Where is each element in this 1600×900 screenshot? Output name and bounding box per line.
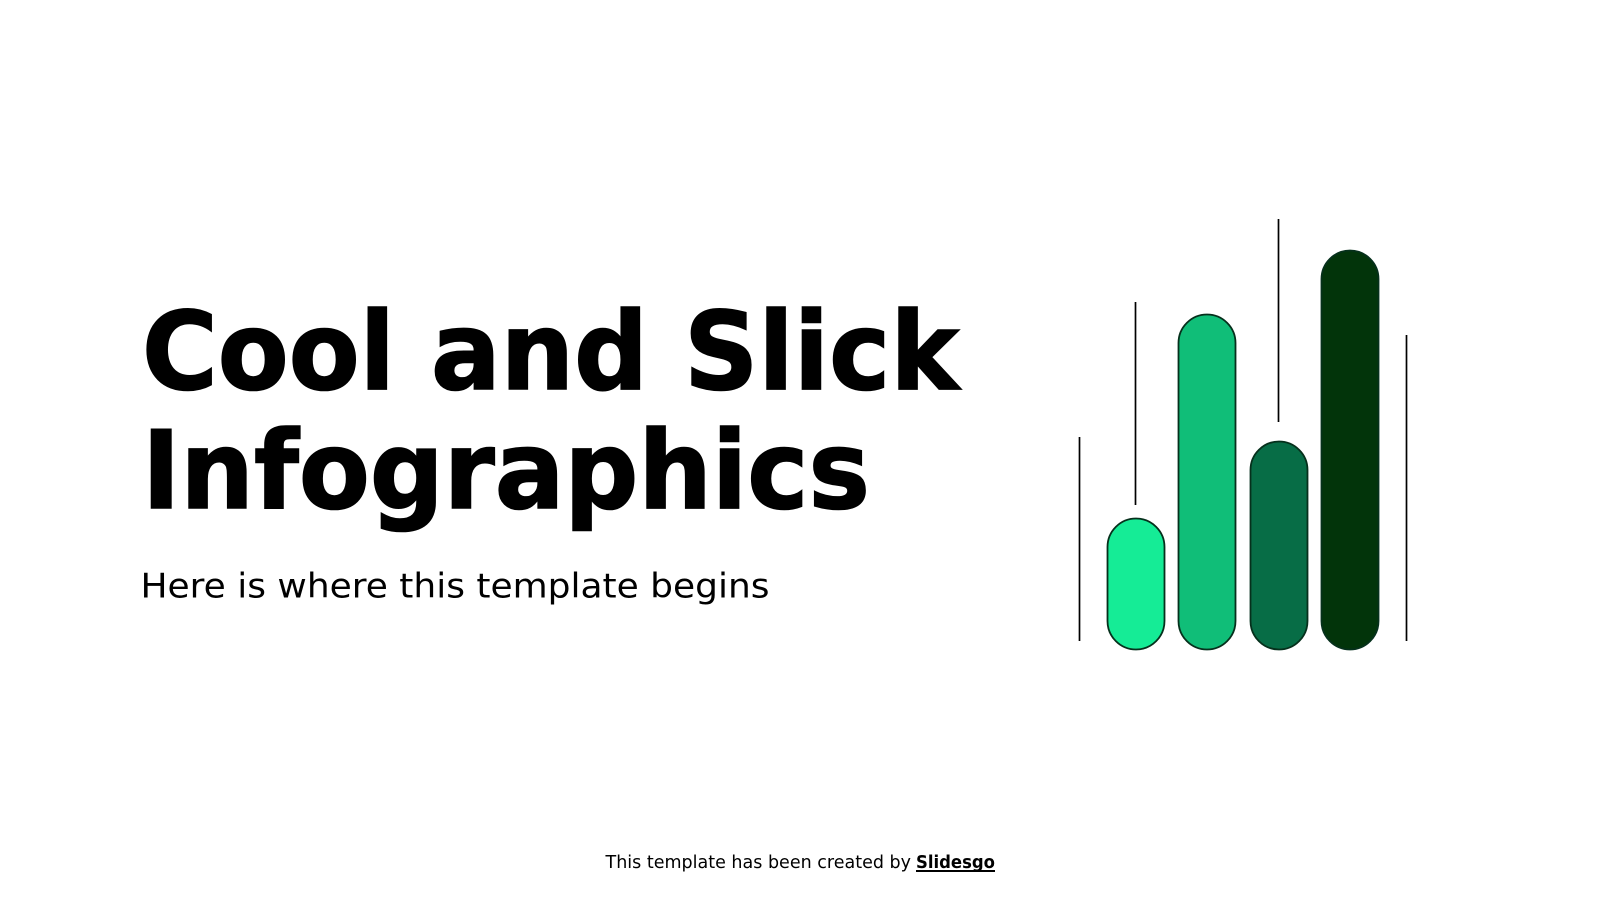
line 2 [1134, 302, 1136, 505]
bar chart graphic [1080, 219, 1406, 650]
footer credit: This template has been created by [604, 853, 911, 873]
title [142, 290, 961, 534]
footer credit: Slidesgo [916, 853, 995, 873]
bar 2 [1178, 314, 1236, 650]
line 4 [1406, 335, 1408, 641]
title: Cool and Slick [142, 290, 961, 415]
title: Infographics [142, 409, 870, 534]
line 1 [1078, 437, 1080, 641]
subtitle: Here is where this template begins [140, 566, 770, 606]
bar 1 [1108, 518, 1164, 650]
bar 3 [1250, 442, 1308, 650]
line 3 [1278, 219, 1280, 422]
bar 4 [1322, 250, 1378, 650]
